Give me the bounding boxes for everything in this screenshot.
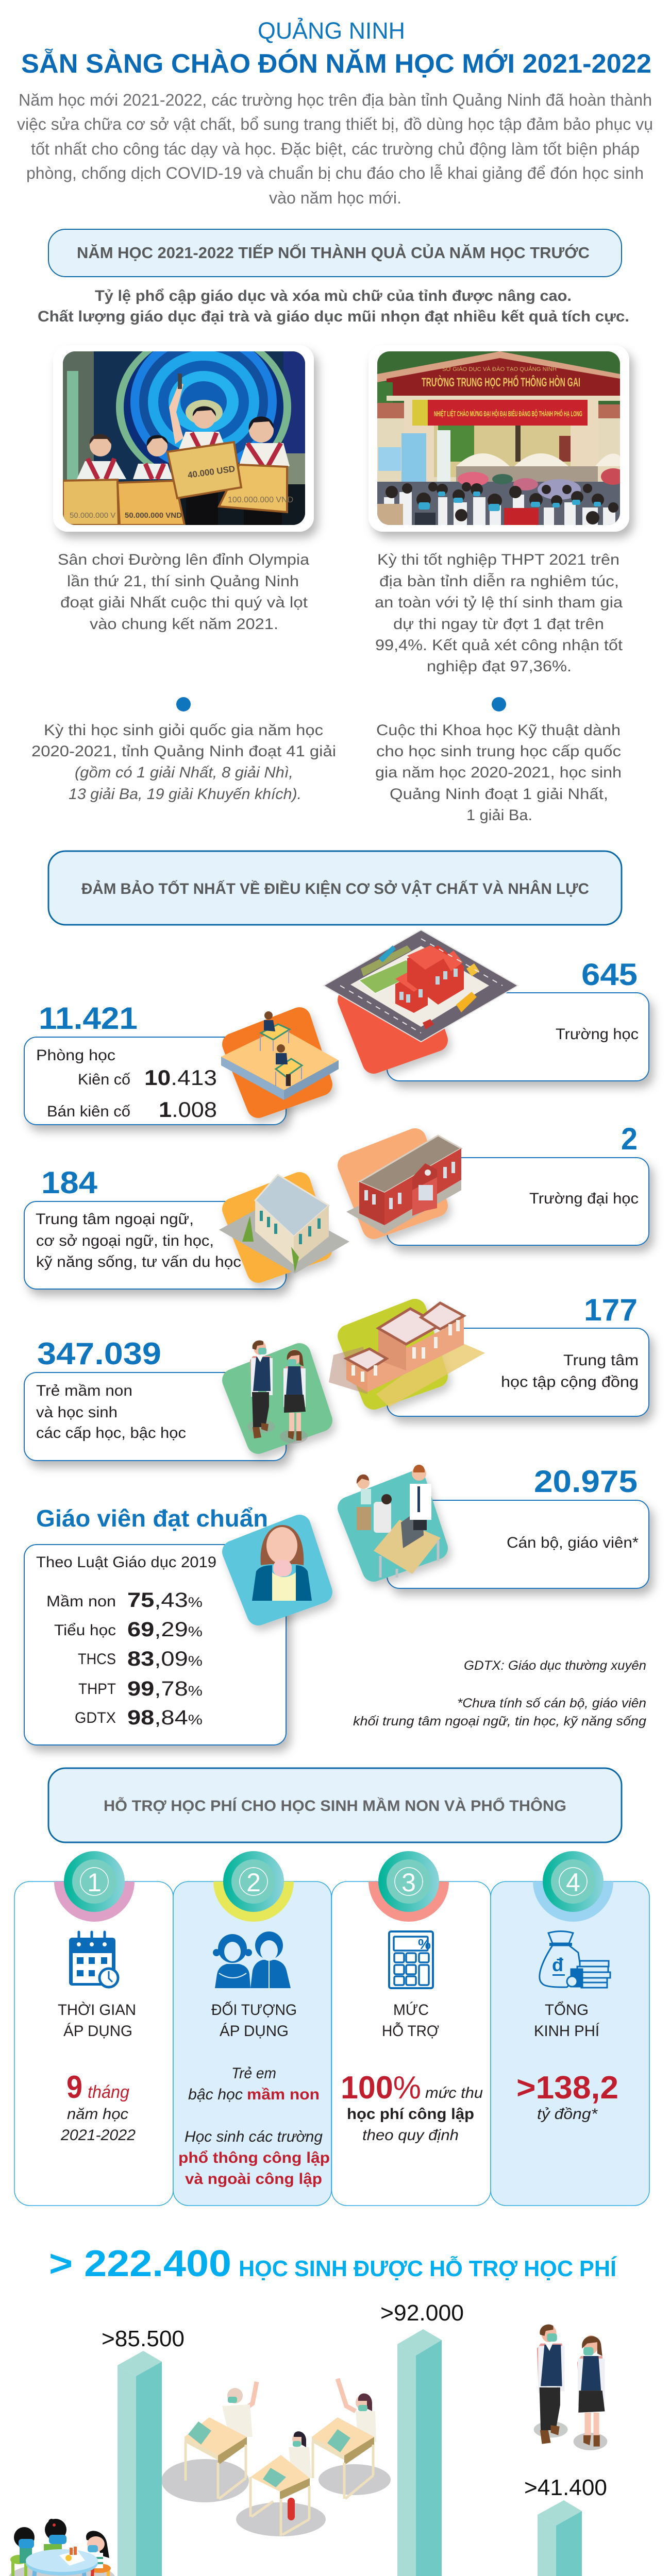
label: Trẻ mầm non <box>36 1382 132 1399</box>
row: semi-solid classrooms: 1.008 <box>159 1097 217 1122</box>
heading: THỜI GIAN <box>58 2002 136 2019</box>
panel: beneficiaries <box>173 1851 331 2206</box>
bullet <box>176 697 191 711</box>
value: năm học <box>67 2106 128 2123</box>
section heading box 2: ĐẢM BẢO TỐT NHẤT VỀ ĐIỀU KIỆN CƠ SỞ VẬT CHẤT VÀ NHÂN LỰC <box>81 880 589 897</box>
label <box>501 1352 639 1391</box>
chart heading <box>49 2243 617 2284</box>
icon: staff at a computer <box>357 1465 441 1578</box>
icon: classroom <box>221 1011 339 1100</box>
panel: total budget <box>491 1851 649 2206</box>
icon: centre building <box>219 1175 349 1274</box>
text: Olympia achievement <box>58 551 309 633</box>
text: national excellent students: (gồm có 1 giải Nhất, 8 giải Nhì, <box>75 764 293 781</box>
row: upper secondary: 99,78 % <box>127 1677 203 1700</box>
value: học phí công lập <box>347 2106 474 2123</box>
text: graduation exam: 99,4%. Kết quả xét công nhận tốt <box>375 637 623 654</box>
icon: two students with masks <box>247 1341 308 1444</box>
heading: ÁP DỤNG <box>63 2023 132 2040</box>
stat panel: language centres 184 <box>24 1165 349 1289</box>
bar chart: supported students by level <box>83 2300 607 2576</box>
text: graduation exam: địa bàn tỉnh diễn ra nghiêm túc, <box>379 573 619 590</box>
illustration: standing students <box>534 2325 607 2450</box>
number: 177 <box>584 1293 638 1327</box>
value: phổ thông công lập <box>178 2149 330 2166</box>
heading <box>211 2001 297 2040</box>
row: semi-solid classrooms <box>47 1097 217 1122</box>
label: Trường học <box>556 1026 639 1043</box>
intro paragraph: tốt nhất cho công tác dạy và học. Đặc biệt, các trường chủ động làm tốt biện pháp <box>31 140 640 158</box>
text: science and technology contest: Quảng Ninh đoạt 1 giải Nhất, <box>390 786 608 803</box>
icon: calculator <box>389 1931 433 1988</box>
label: kỹ năng sống, tư vấn du học <box>36 1253 241 1270</box>
heading: ÁP DỤNG <box>220 2023 289 2040</box>
crowd <box>377 482 620 525</box>
intro paragraph <box>17 91 653 207</box>
row: primary: Tiểu học <box>54 1622 116 1639</box>
badge 2 <box>213 1851 294 1922</box>
label: Trường đại học <box>529 1190 639 1207</box>
row: preschool: 75,43 % <box>127 1589 203 1612</box>
photo card: Olympia winners <box>53 330 314 532</box>
value labels: >92.000 <box>380 2300 464 2326</box>
illustration: kindergarten children <box>9 2519 115 2576</box>
photo card: Olympia winners: 50.000.000 V <box>70 511 115 520</box>
number: 11.421 <box>39 1001 138 1036</box>
heading <box>58 2002 136 2040</box>
row: continuing education: GDTX <box>75 1709 116 1726</box>
badge 2: 2 <box>246 1868 261 1897</box>
icon: university building <box>346 1136 461 1234</box>
text: Olympia achievement: vào chung kết năm 2021. <box>90 616 278 633</box>
text: science and technology contest: cho học sinh trung học cấp quốc <box>376 743 621 760</box>
label: các cấp học, bậc học <box>36 1425 186 1442</box>
title block <box>21 18 651 79</box>
value <box>516 2070 618 2123</box>
prize boards <box>63 480 119 525</box>
row: upper secondary: THPT <box>78 1681 116 1698</box>
icon: teacher <box>252 1525 312 1601</box>
chart heading: HỌC SINH ĐƯỢC HỖ TRỢ HỌC PHÍ <box>239 2255 617 2281</box>
label: và học sinh <box>36 1404 118 1421</box>
row: continuing education <box>75 1706 203 1729</box>
text: national excellent students: 13 giải Ba, 19 giải Khuyến khích). <box>69 786 301 803</box>
stat panel: students 347.039 <box>24 1336 321 1461</box>
icon: money bag: đ <box>552 1954 563 1975</box>
value: bậc học <box>188 2086 243 2103</box>
stat panel: staff 20.975 <box>349 1464 649 1588</box>
contestants <box>169 382 183 444</box>
bullet <box>492 697 506 711</box>
bar: upper secondary <box>538 2500 582 2576</box>
row: semi-solid classrooms: Bán kiên cố <box>47 1103 130 1120</box>
illustration: students at desks <box>161 2379 391 2536</box>
text: national excellent students: Kỳ thi học sinh giỏi quốc gia năm học <box>44 722 323 739</box>
value: và ngoài công lập <box>185 2171 322 2188</box>
title: main heading: SẴN SÀNG CHÀO ĐÓN NĂM HỌC MỚI 2021-2022 <box>21 48 651 79</box>
text: graduation exam <box>375 551 623 675</box>
badge 3 <box>368 1851 449 1922</box>
label: Trung tâm ngoại ngữ, <box>36 1211 194 1228</box>
row: preschool: Mầm non <box>46 1593 116 1610</box>
label: học tập cộng đồng <box>501 1374 639 1391</box>
section heading box 1 <box>48 229 622 277</box>
value: mầm non <box>247 2086 320 2103</box>
row: lower secondary: 83,09 % <box>127 1648 203 1670</box>
number: 20.975 <box>534 1464 638 1499</box>
icon: students <box>213 1931 291 1988</box>
stat panel: community learning centres 177 <box>329 1293 649 1416</box>
chart heading: > 222.400 <box>49 2243 231 2284</box>
value labels <box>102 2300 607 2576</box>
footnotes: GDTX: Giáo dục thường xuyên <box>464 1658 646 1673</box>
number: 347.039 <box>37 1336 161 1371</box>
text: Olympia achievement: đoạt giải Nhất cuộc thi quý và lọt <box>60 594 308 611</box>
photo card: exam at Hòn Gai high school <box>368 345 629 532</box>
icon: calendar <box>69 1932 118 1987</box>
row: primary <box>54 1618 203 1641</box>
text: science and technology contest <box>375 722 622 824</box>
row: lower secondary: THCS <box>78 1651 116 1668</box>
stat panel: universities 2 <box>346 1122 649 1245</box>
text: science and technology contest: gia năm học 2020-2021, học sinh <box>375 764 622 781</box>
bar: lower secondary <box>397 2329 442 2576</box>
text: science and technology contest: 1 giải Ba. <box>466 807 532 824</box>
icon: money bag <box>540 1931 610 1988</box>
photo card: exam at Hòn Gai high school: SỞ GIÁO DỤC VÀ ĐÀO TẠO QUẢNG NINH <box>442 366 557 372</box>
row: solid classrooms: Kiên cố <box>78 1071 130 1088</box>
row: lower secondary <box>78 1648 203 1670</box>
value: >138,2 <box>516 2070 618 2106</box>
intro paragraph: phòng, chống dịch COVID-19 và chuẩn bị chu đáo cho lễ khai giảng để đón học sinh <box>26 164 644 182</box>
photo card: Olympia winners: 100.000.000 VND <box>228 496 293 504</box>
text: Olympia achievement: Sân chơi Đường lên đỉnh Olympia <box>58 551 309 568</box>
sub-heading: Theo Luật Giáo dục 2019 <box>36 1554 216 1571</box>
label: Phòng học <box>36 1047 115 1064</box>
value: 2021-2022 <box>60 2127 136 2144</box>
label: Cán bộ, giáo viên* <box>507 1534 639 1551</box>
bar: preschool <box>118 2351 162 2576</box>
photo card: Olympia winners: 50.000.000 VND <box>125 511 182 520</box>
text: science and technology contest: Cuộc thi Khoa học Kỹ thuật dành <box>376 722 621 739</box>
text: graduation exam: an toàn với tỷ lệ thí sinh tham gia <box>375 594 623 611</box>
label <box>36 1382 186 1442</box>
row: solid classrooms <box>78 1065 217 1090</box>
badge 4: 4 <box>566 1868 580 1897</box>
stat panel: classrooms 11.421 <box>24 1001 339 1125</box>
heading: Giáo viên đạt chuẩn <box>36 1505 268 1532</box>
text: Olympia achievement: lần thứ 21, thí sinh Quảng Ninh <box>67 573 299 590</box>
intro paragraph: việc sửa chữa cơ sở vật chất, bổ sung trang thiết bị, đồ dùng học tập đảm bảo phục vụ <box>17 115 653 133</box>
heading: KINH PHÍ <box>534 2023 600 2040</box>
heading: TỔNG <box>545 2001 589 2019</box>
stat panel: schools 645 <box>324 930 649 1081</box>
section heading box 3 <box>48 1768 622 1842</box>
icon: school campus <box>324 930 518 1042</box>
icon: community centre building <box>329 1303 485 1407</box>
panel: support level <box>332 1851 491 2206</box>
heading: ĐỐI TƯỢNG <box>211 2001 297 2019</box>
section heading box 3: HỖ TRỢ HỌC PHÍ CHO HỌC SINH MẦM NON VÀ PHỔ THÔNG <box>104 1797 566 1815</box>
heading: HỖ TRỢ <box>382 2022 439 2040</box>
number: 2 <box>621 1122 638 1156</box>
panel: time of application <box>14 1851 173 2206</box>
heading <box>382 2002 439 2040</box>
section heading box 2 <box>48 851 622 925</box>
row: continuing education: 98,84 % <box>127 1706 203 1729</box>
badge 1: 1 <box>87 1868 102 1897</box>
section lead text: Tỷ lệ phổ cập giáo dục và xóa mù chữ của tỉnh được nâng cao. <box>95 287 572 304</box>
label <box>36 1211 241 1270</box>
value: 100% <box>341 2070 421 2106</box>
heading <box>534 2001 600 2040</box>
stat panel: qualified teachers <box>24 1505 321 1745</box>
row: solid classrooms: 10.413 <box>144 1065 217 1090</box>
value: tỷ đồng* <box>537 2106 598 2123</box>
value <box>178 2065 330 2188</box>
photo card: Olympia winners: 40.000 USD <box>187 464 236 480</box>
section lead text <box>38 287 629 325</box>
footnotes <box>353 1658 646 1728</box>
row: preschool <box>46 1589 203 1612</box>
value labels: >41.400 <box>524 2475 607 2500</box>
value: Học sinh các trường <box>185 2128 323 2145</box>
value: theo quy định <box>362 2127 459 2144</box>
value labels: >85.500 <box>102 2326 185 2351</box>
text: national excellent students <box>31 722 336 803</box>
value <box>341 2070 483 2144</box>
value: 9 <box>66 2070 82 2105</box>
number: 184 <box>41 1165 98 1200</box>
footnotes: *Chưa tính số cán bộ, giáo viên <box>457 1696 646 1710</box>
title: province: QUẢNG NINH <box>258 18 405 44</box>
section heading box 1: NĂM HỌC 2021-2022 TIẾP NỐI THÀNH QUẢ CỦA NĂM HỌC TRƯỚC <box>77 243 590 262</box>
intro paragraph: vào năm học mới. <box>269 189 401 207</box>
value: mức thu <box>425 2084 483 2102</box>
intro paragraph: Năm học mới 2021-2022, các trường học trên địa bàn tỉnh Quảng Ninh đã hoàn thành <box>19 91 652 109</box>
value <box>60 2070 136 2144</box>
icon: calculator: % <box>418 1936 431 1952</box>
heading: MỨC <box>393 2002 429 2019</box>
footnotes: khối trung tâm ngoại ngữ, tin học, kỹ năng sống <box>353 1714 646 1728</box>
badge 4 <box>533 1851 613 1922</box>
badge 1 <box>54 1851 135 1922</box>
text: graduation exam: dự thi ngay từ đợt 1 đạt trên <box>393 616 604 633</box>
value: tháng <box>88 2082 129 2102</box>
label: cơ sở ngoại ngữ, tin học, <box>36 1232 214 1249</box>
section lead text: Chất lượng giáo dục đại trà và giáo dục mũi nhọn đạt nhiều kết quả tích cực. <box>38 308 629 325</box>
text: graduation exam: Kỳ thi tốt nghiệp THPT 2021 trên <box>377 551 619 568</box>
text: graduation exam: nghiệp đạt 97,36%. <box>427 658 572 675</box>
value: Trẻ em <box>231 2065 276 2082</box>
row: primary: 69,29 % <box>127 1618 203 1641</box>
number: 645 <box>581 957 638 992</box>
row: upper secondary <box>78 1677 203 1700</box>
label: Trung tâm <box>563 1352 639 1369</box>
badge 3: 3 <box>401 1868 416 1897</box>
text: national excellent students: 2020-2021, tỉnh Quảng Ninh đoạt 41 giải <box>31 743 336 760</box>
